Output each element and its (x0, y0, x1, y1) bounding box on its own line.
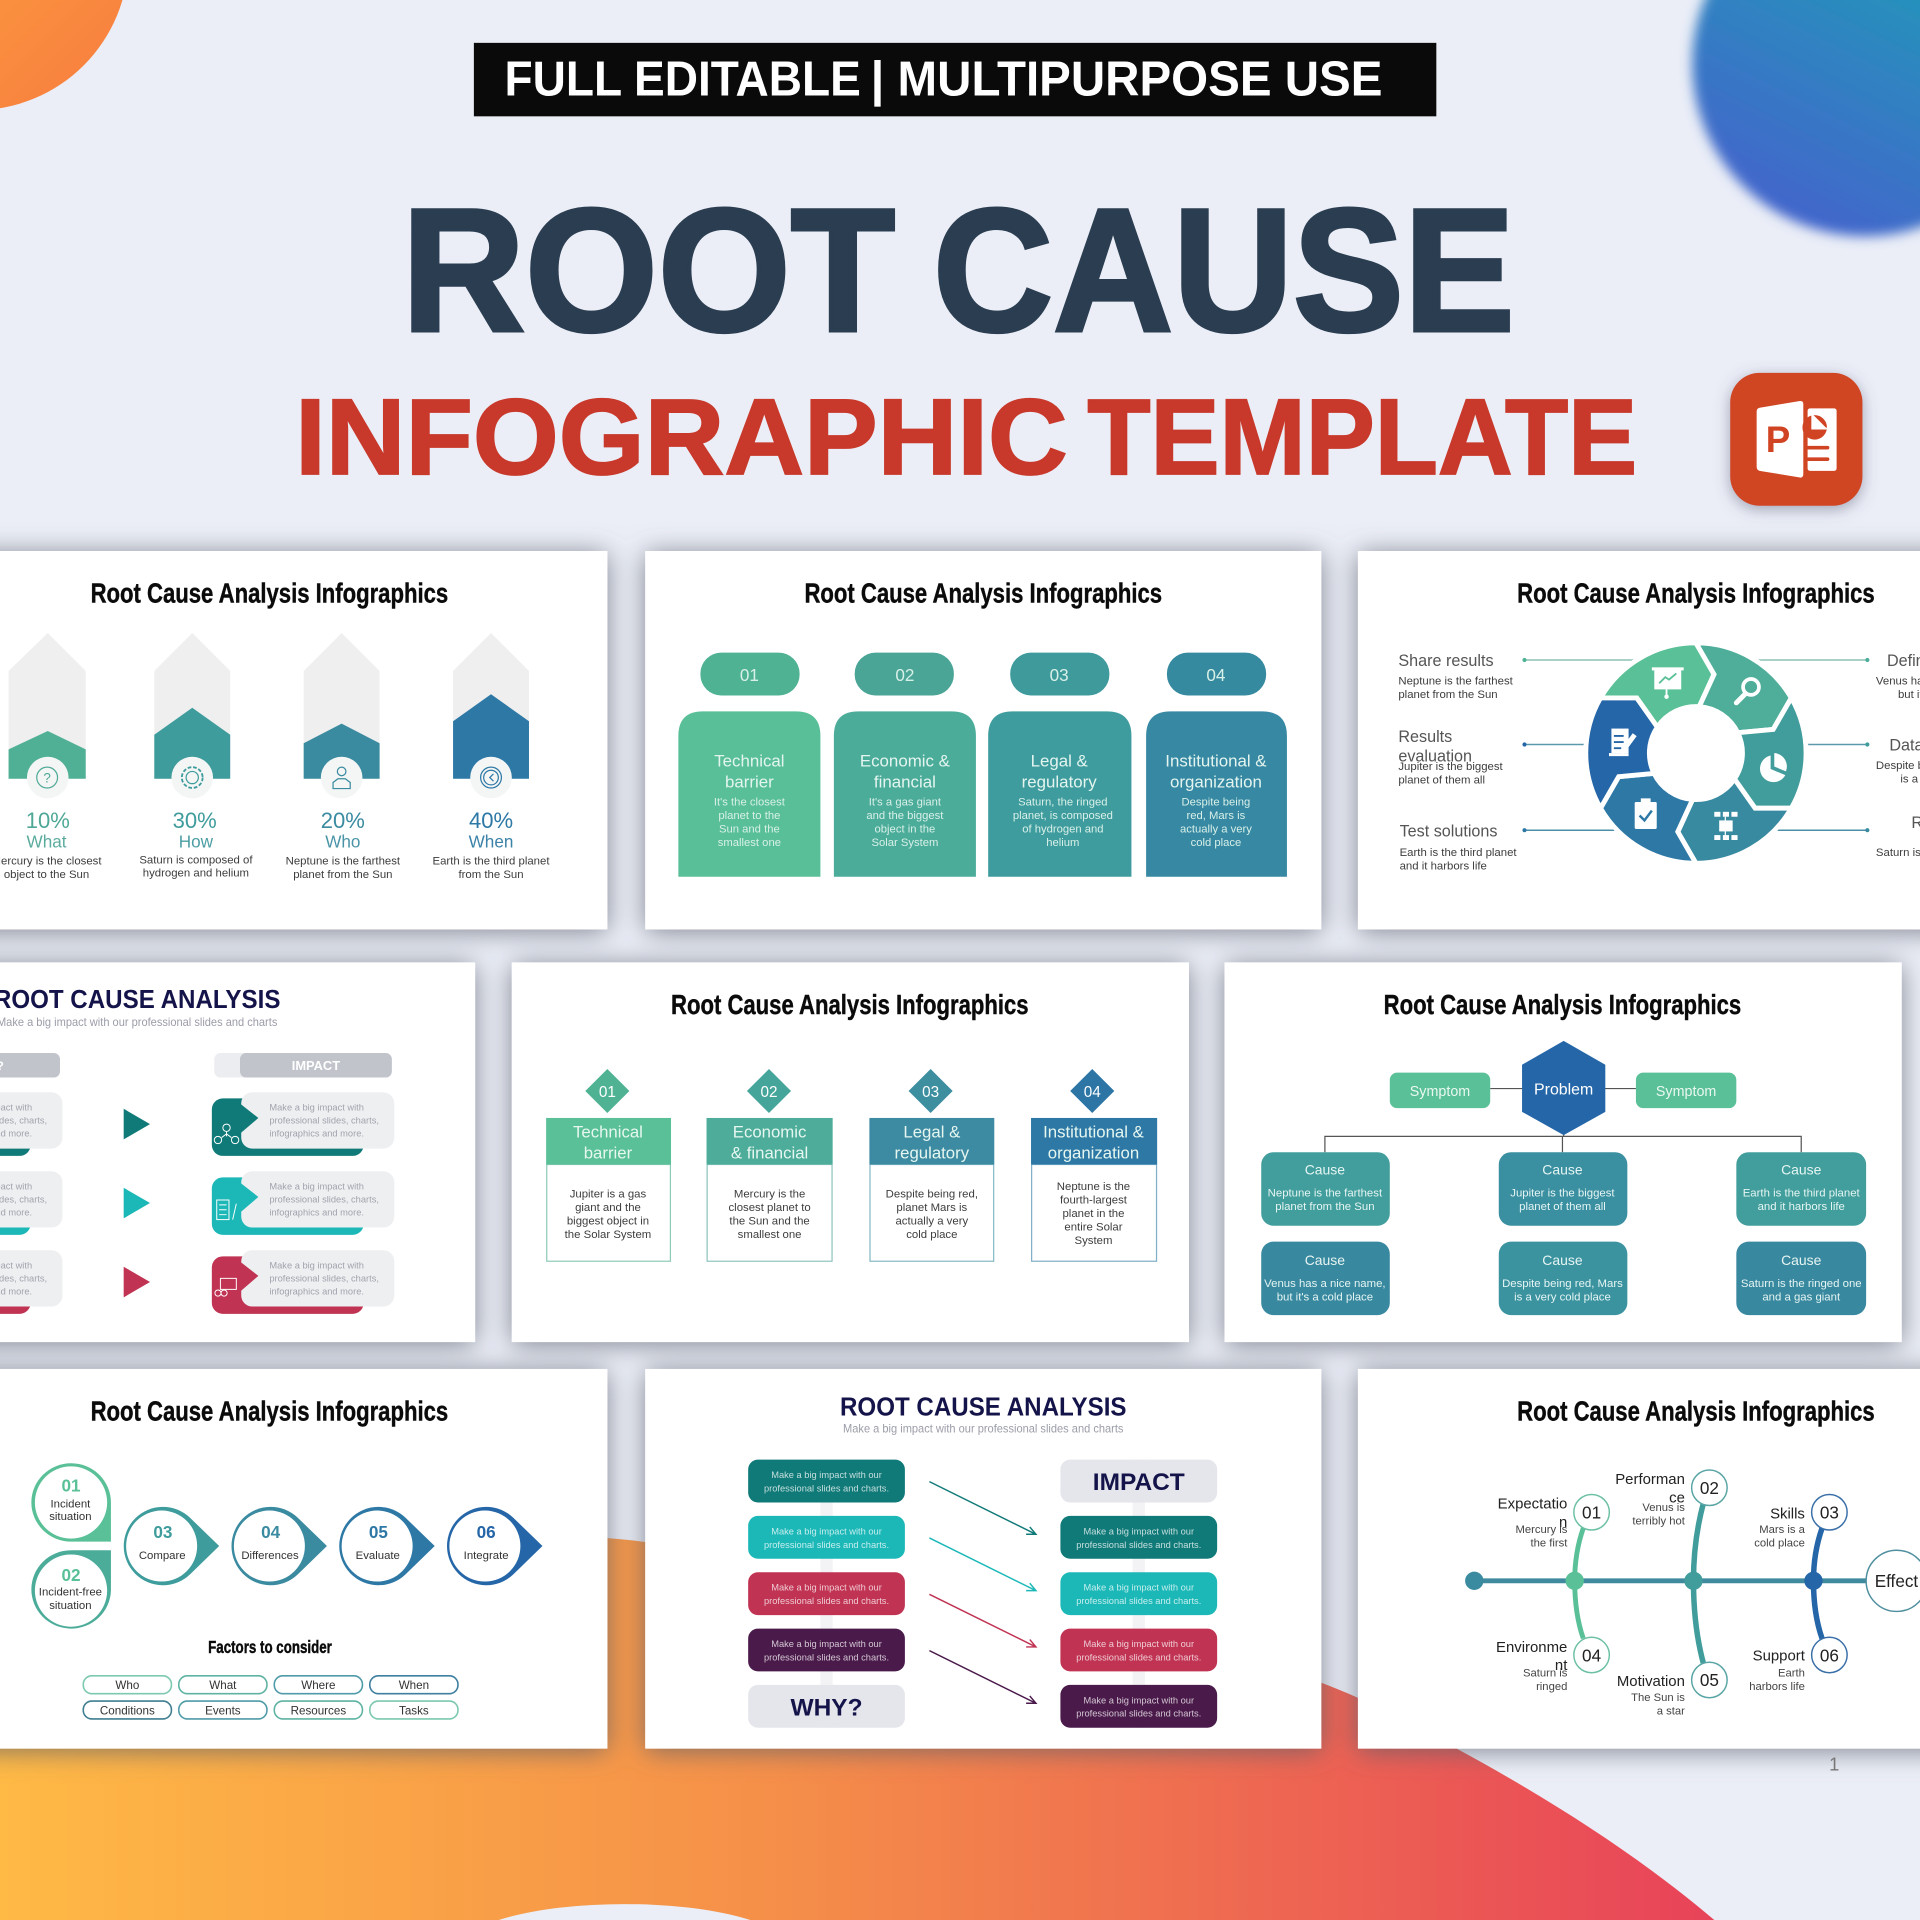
factors heading: Factors to consider (208, 1637, 332, 1657)
card 04: cold place (1191, 837, 1241, 849)
connector lines (1522, 658, 1869, 832)
step 06: 06 (477, 1522, 496, 1542)
row 1 (0, 1092, 394, 1156)
icon: pie chart (1760, 753, 1787, 782)
step 02: Incident-free (39, 1587, 102, 1599)
column: who: planet from the Sun (293, 869, 392, 881)
icon: checklist pen (1609, 729, 1635, 756)
column 04: entire Solar (1064, 1222, 1123, 1234)
factor labels (100, 1679, 429, 1717)
cause cards top row: and it harbors life (1758, 1201, 1845, 1213)
labels left: and it harbors life (1400, 860, 1487, 872)
node 03: cold place (1754, 1538, 1805, 1550)
cause cards bottom row (1261, 1242, 1866, 1315)
tree connectors (1325, 1089, 1801, 1152)
step 02 (31, 1550, 111, 1629)
cause cards bottom row: Cause (1305, 1252, 1345, 1268)
node 02: 02 (1700, 1478, 1719, 1498)
spine (1465, 1572, 1873, 1590)
column: who: Who (325, 831, 360, 851)
card 01: Technical (714, 752, 785, 771)
labels left: Neptune is the farthest (1398, 675, 1514, 687)
column: how: hydrogen and helium (143, 868, 249, 880)
card 01: barrier (725, 772, 774, 791)
card 02: financial (874, 772, 936, 791)
cause cards top row: planet from the Sun (1275, 1201, 1375, 1213)
column: how: How (179, 831, 214, 851)
column 01: Jupiter is a gas (570, 1189, 647, 1201)
impact column: IMPACT (1093, 1469, 1185, 1496)
card 03: planet, is composed (1013, 810, 1113, 822)
decorative blue circle (1692, 0, 1920, 236)
node 05: The Sun is (1631, 1692, 1685, 1704)
node 06 (1749, 1637, 1847, 1693)
labels right (1876, 652, 1920, 859)
node 05: Motivation (1617, 1673, 1685, 1690)
heading: Root Cause Analysis Infographics (671, 989, 1029, 1020)
symptom right: Symptom (1656, 1084, 1716, 1100)
why column: professional slides and charts. (764, 1596, 889, 1606)
icon: magnifier (1736, 679, 1759, 703)
column: when: Earth is the third planet (433, 855, 550, 867)
panel: problem tree (1224, 962, 1902, 1342)
why column: Make a big impact with our (771, 1639, 882, 1649)
column 02: closest planet to (728, 1202, 811, 1214)
card 03: regulatory (1022, 772, 1097, 791)
column: who (286, 633, 401, 881)
panel: four barriers (645, 551, 1321, 929)
node 02: Venus is (1642, 1502, 1685, 1514)
card 02: and the biggest (866, 810, 944, 822)
column: what (0, 633, 102, 881)
column: what: object to the Sun (4, 869, 89, 881)
node 01: the first (1530, 1538, 1568, 1550)
subheading: Make a big impact with our professional slides and charts (0, 1016, 278, 1029)
factor labels: When (399, 1679, 429, 1692)
column 03: Despite being red, (886, 1189, 978, 1201)
column 04: fourth-largest (1060, 1195, 1128, 1207)
step 02: situation (49, 1600, 92, 1612)
step 06 (447, 1507, 542, 1585)
subtitle: INFOGRAPHIC (295, 376, 1068, 497)
column 02: the Sun and the (729, 1215, 810, 1227)
column 02: Economic (733, 1123, 806, 1142)
node 01: Expectatio (1498, 1496, 1567, 1513)
panel: percent arrows (0, 551, 607, 929)
column 03: cold place (906, 1229, 957, 1241)
why column: Make a big impact with our (771, 1526, 882, 1536)
cause cards top row: Cause (1542, 1161, 1583, 1177)
why column: professional slides and charts. (764, 1652, 889, 1662)
cause cards bottom row: Saturn is the ringed one (1741, 1278, 1862, 1290)
card 04: Despite being (1182, 797, 1250, 809)
column 01: Technical (573, 1123, 643, 1142)
column 02: 02 (760, 1084, 777, 1101)
card 03: Legal & (1031, 752, 1088, 771)
panel: why impact left (0, 962, 475, 1342)
column: what: 10% (26, 808, 70, 833)
why column: professional slides and charts. (764, 1483, 889, 1493)
arrows (929, 1482, 1036, 1703)
node 02: ce (1669, 1489, 1685, 1506)
problem hexagon (1522, 1041, 1605, 1135)
cause cards top row: Cause (1781, 1161, 1822, 1177)
node 04 (1496, 1637, 1609, 1693)
column 03: actually a very (895, 1215, 968, 1227)
panel: process circles (0, 1369, 607, 1749)
node 06: Earth (1778, 1667, 1805, 1679)
decorative bottom blob (459, 1904, 790, 1920)
column 04: organization (1048, 1143, 1139, 1162)
labels left: planet from the Sun (1398, 689, 1498, 701)
node 01: Mercury is (1515, 1524, 1568, 1536)
cause cards top row (1261, 1152, 1866, 1226)
card 03 (988, 653, 1131, 877)
cause cards bottom row: Venus has a nice name, (1264, 1278, 1386, 1290)
banner: MULTIPURPOSE USE (898, 53, 1382, 107)
panel shadows (0, 551, 1920, 1749)
why header (0, 1053, 60, 1078)
column: who: Neptune is the farthest (286, 855, 401, 867)
step 03: Compare (139, 1550, 186, 1562)
column: how: 30% (173, 808, 217, 833)
card 03: 03 (1050, 665, 1069, 685)
node 06: 06 (1820, 1646, 1839, 1666)
column 04: Neptune is the (1057, 1181, 1130, 1193)
why column: Make a big impact with our (771, 1583, 882, 1593)
step 05: Evaluate (356, 1550, 400, 1562)
card 01: planet to the (718, 810, 780, 822)
impact column: Make a big impact with our (1083, 1526, 1194, 1536)
cause cards top row: Cause (1305, 1161, 1345, 1177)
card 01: It's the closest (714, 797, 786, 809)
heading: ROOT CAUSE ANALYSIS (840, 1394, 1127, 1422)
row 1: infographics and more. (269, 1128, 364, 1138)
symptom left (1390, 1073, 1490, 1108)
heading: Root Cause Analysis Infographics (804, 577, 1162, 608)
column 04: Institutional & (1043, 1123, 1144, 1142)
node 03 (1754, 1494, 1847, 1550)
row 1: professional slides, charts, (269, 1115, 379, 1125)
column: how (139, 633, 253, 880)
why column: WHY? (791, 1695, 863, 1722)
column: what: What (27, 831, 67, 851)
step 06: Integrate (464, 1550, 509, 1562)
node 02: Performan (1615, 1471, 1685, 1488)
step 01: 01 (61, 1475, 81, 1495)
card 04: organization (1170, 772, 1262, 791)
column 02: Mercury is the (734, 1189, 805, 1201)
panel: donut cycle (1358, 551, 1920, 929)
node 03: 03 (1820, 1502, 1839, 1522)
step 01: Incident (50, 1498, 91, 1510)
card 01: 01 (740, 665, 759, 685)
column 01: giant and the (575, 1202, 641, 1214)
impact column: Make a big impact with our (1083, 1583, 1194, 1593)
impact column: professional slides and charts. (1076, 1709, 1201, 1719)
column: how: Saturn is composed of (139, 854, 253, 866)
column: when: 40% (469, 808, 513, 833)
page number: 1 (1829, 1754, 1839, 1775)
subtitle: TEMPLATE (1087, 376, 1637, 497)
node 04: Environme (1496, 1639, 1567, 1656)
node 06: harbors life (1749, 1681, 1805, 1693)
cause cards bottom row: but it's a cold place (1277, 1291, 1373, 1303)
column 03: regulatory (895, 1143, 970, 1162)
cause cards bottom row: Cause (1781, 1252, 1822, 1268)
card 04: actually a very (1180, 824, 1252, 836)
factor labels: Resources (291, 1704, 346, 1717)
factor labels: Events (205, 1704, 241, 1717)
step 05 (339, 1507, 435, 1585)
panel: fishbone (1358, 1369, 1920, 1749)
title: CAUSE (933, 173, 1515, 369)
column 03: planet Mars is (896, 1202, 968, 1214)
step 03 (124, 1507, 219, 1585)
node 04: Saturn is (1523, 1667, 1568, 1679)
column 04: planet in the (1062, 1208, 1124, 1220)
card 04: red, Mars is (1187, 810, 1246, 822)
heading: Root Cause Analysis Infographics (91, 577, 448, 608)
labels left: Results (1398, 728, 1452, 746)
column 04 (1031, 1069, 1157, 1261)
cause cards bottom row: Cause (1542, 1252, 1583, 1268)
icon: powerpoint: P (1766, 419, 1790, 460)
column 01: barrier (584, 1143, 633, 1162)
decorative orange circle (0, 0, 129, 110)
why column: Make a big impact with our (771, 1470, 882, 1480)
step 04: 04 (261, 1522, 281, 1542)
impact column (1060, 1460, 1217, 1728)
impact column: Make a big impact with our (1083, 1639, 1194, 1649)
node 05 (1617, 1662, 1727, 1717)
factor labels: Tasks (399, 1704, 429, 1717)
step 05: 05 (369, 1522, 388, 1542)
column 02 (707, 1069, 833, 1261)
card 03: of hydrogen and (1022, 824, 1104, 836)
node 05: a star (1657, 1705, 1685, 1717)
card 02: 02 (895, 665, 914, 685)
bone teal (1684, 1504, 1703, 1663)
card 04: Institutional & (1165, 752, 1267, 771)
card 04: 04 (1206, 665, 1226, 685)
column 04: System (1075, 1235, 1112, 1247)
bone green (1566, 1528, 1584, 1638)
column 03: 03 (922, 1084, 939, 1101)
title: ROOT (402, 173, 895, 369)
column: what: ? (43, 770, 51, 785)
subtitle (295, 376, 1637, 497)
card 01: Sun and the (719, 824, 780, 836)
panel: why impact arrows (645, 1369, 1321, 1749)
row 1: Make a big impact with (269, 1103, 364, 1113)
impact column: professional slides and charts. (1076, 1596, 1201, 1606)
step 04 (231, 1507, 327, 1585)
labels left: planet of them all (1398, 775, 1485, 787)
card 02: object in the (875, 824, 935, 836)
cause cards top row: Jupiter is the biggest (1510, 1187, 1615, 1199)
row 3 (0, 1250, 394, 1314)
node 01: n (1559, 1514, 1567, 1531)
panel: diamond columns (512, 962, 1189, 1342)
bone blue (1804, 1528, 1823, 1638)
column: when: from the Sun (458, 869, 524, 881)
node 05: 05 (1700, 1670, 1719, 1690)
step 04: Differences (241, 1550, 299, 1562)
banner (474, 43, 1436, 116)
column 01: biggest object in (567, 1215, 649, 1227)
step 02: 02 (61, 1565, 81, 1585)
card 02: It's a gas giant (869, 797, 942, 809)
cause cards bottom row: Despite being red, Mars (1502, 1278, 1623, 1290)
decorative gradient hill (0, 1535, 1714, 1920)
impact header: IMPACT (292, 1058, 340, 1073)
column 03: Legal & (903, 1123, 960, 1142)
row 3: infographics and more. (269, 1286, 364, 1296)
icon: hierarchy (1714, 812, 1738, 840)
subheading: Make a big impact with our professional slides and charts (843, 1423, 1124, 1436)
icon: presentation (1652, 667, 1684, 699)
step 03: 03 (153, 1522, 172, 1542)
column: when (433, 633, 550, 881)
effect circle: Effect (1875, 1571, 1918, 1591)
node 02 (1615, 1470, 1727, 1527)
column 01 (546, 1069, 671, 1261)
icon: clipboard (1635, 798, 1657, 829)
labels left: Earth is the third planet (1400, 847, 1517, 859)
step 01: situation (49, 1511, 92, 1523)
connector stems (827, 1460, 1139, 1728)
cause cards top row: Earth is the third planet (1743, 1187, 1861, 1199)
row 2: professional slides, charts, (269, 1194, 379, 1204)
column 02: smallest one (738, 1229, 802, 1241)
card 01 (678, 653, 820, 877)
card 01: smallest one (718, 837, 781, 849)
why column (748, 1460, 905, 1728)
card 02: Economic & (860, 752, 950, 771)
why column: professional slides and charts. (764, 1540, 889, 1550)
column 03 (869, 1069, 994, 1261)
banner: FULL EDITABLE (504, 53, 861, 107)
symptom right (1636, 1073, 1736, 1108)
cause cards top row: Neptune is the farthest (1268, 1187, 1383, 1199)
node 06: Support (1753, 1647, 1806, 1664)
banner: | (871, 53, 884, 107)
card 02: Solar System (871, 837, 938, 849)
node 04: 04 (1582, 1646, 1602, 1666)
problem hexagon: Problem (1534, 1082, 1593, 1099)
column 01: the Solar System (565, 1229, 651, 1241)
symptom left: Symptom (1410, 1084, 1470, 1100)
node 03: Mars is a (1759, 1524, 1806, 1536)
heading: Root Cause Analysis Infographics (91, 1395, 448, 1426)
impact header (214, 1053, 392, 1078)
column: when: When (469, 831, 513, 851)
cause cards top row: planet of them all (1519, 1201, 1606, 1213)
node 03: Skills (1770, 1505, 1805, 1522)
node 04: nt (1555, 1657, 1568, 1674)
card 03: Saturn, the ringed (1018, 797, 1108, 809)
heading: ROOT CAUSE ANALYSIS (0, 986, 280, 1014)
factor labels: What (209, 1679, 237, 1692)
row 3: professional slides, charts, (269, 1273, 379, 1283)
impact column: professional slides and charts. (1076, 1652, 1201, 1662)
impact column: professional slides and charts. (1076, 1540, 1201, 1550)
node 01 (1498, 1494, 1609, 1550)
icon: powerpoint (1730, 373, 1862, 506)
card 02 (834, 653, 976, 877)
labels left: Jupiter is the biggest (1398, 761, 1504, 773)
title (402, 173, 1515, 369)
labels left: evaluation (1398, 748, 1472, 766)
column 02: & financial (731, 1143, 808, 1162)
node 04: ringed (1536, 1681, 1567, 1693)
labels left: Share results (1398, 652, 1494, 670)
heading: Root Cause Analysis Infographics (1384, 989, 1741, 1020)
factor labels: Conditions (100, 1704, 155, 1717)
node 02: terribly hot (1632, 1515, 1686, 1527)
cause cards bottom row: is a very cold place (1514, 1291, 1611, 1303)
row 2 (0, 1171, 394, 1235)
labels left: Test solutions (1400, 822, 1497, 840)
labels left (1398, 652, 1517, 872)
step 01 (31, 1463, 111, 1542)
card 04 (1146, 653, 1287, 877)
cause cards bottom row: and a gas giant (1762, 1291, 1841, 1303)
donut chart (1586, 643, 1806, 863)
column 01: 01 (599, 1084, 616, 1101)
card 03: helium (1046, 837, 1079, 849)
row 2: Make a big impact with (269, 1182, 364, 1192)
column: who: 20% (321, 808, 365, 833)
column 04: 04 (1084, 1084, 1101, 1101)
node 01: 01 (1582, 1502, 1601, 1522)
factor pills (83, 1676, 458, 1719)
row 2: infographics and more. (269, 1207, 364, 1217)
impact column: Make a big impact with our (1083, 1695, 1194, 1705)
factor labels: Where (301, 1679, 335, 1692)
factor labels: Who (115, 1679, 139, 1692)
effect circle (1866, 1550, 1920, 1611)
row 3: Make a big impact with (269, 1261, 364, 1271)
